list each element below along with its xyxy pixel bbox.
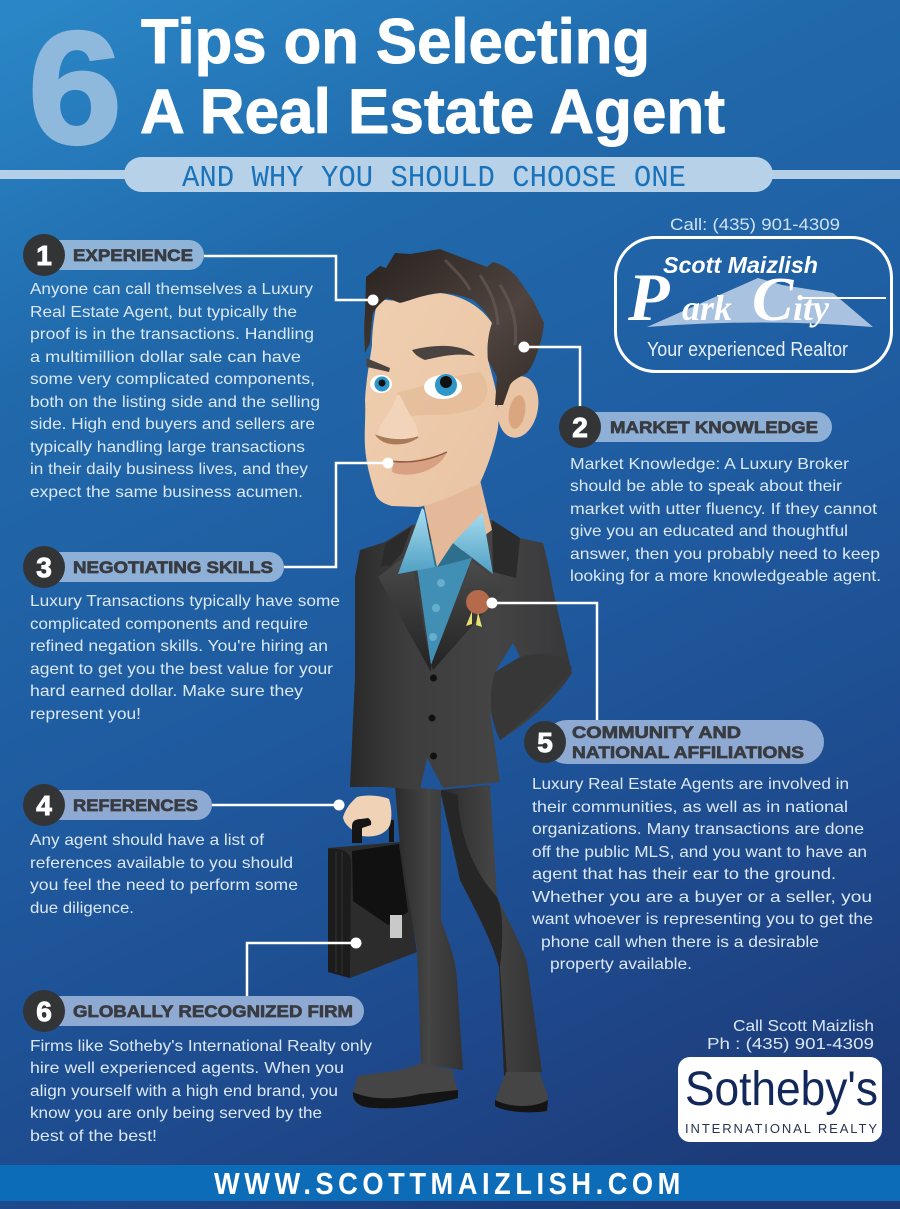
big numeral 6: 6 <box>28 0 122 177</box>
phone number top: Call: (435) 901-4309 <box>670 215 840 234</box>
nose <box>378 395 418 442</box>
tip 1: experience: both on the listing side and the selling <box>30 394 320 411</box>
tip 3: negotiating skills: Luxury Transactions typically have some <box>30 593 340 610</box>
tip 5: community and national affiliations: off the public MLS, and you want to have an <box>532 844 867 861</box>
contact text bottom: Ph : (435) 901-4309 <box>707 1036 874 1053</box>
left shoe <box>353 1063 458 1108</box>
tip 1: experience: typically handling large transactions <box>30 439 305 456</box>
brows <box>412 346 475 360</box>
briefcase handle <box>352 818 371 843</box>
tip 5: community and national affiliations: want whoever is representing you to get the <box>531 911 873 928</box>
tip 5: community and national affiliations: organizations. Many transactions are done <box>532 821 864 838</box>
footer band <box>0 1165 900 1201</box>
tip 4: references: 4 <box>36 790 52 821</box>
tip 2: market knowledge: give you an educated and thoughtful <box>570 523 848 540</box>
right shoe <box>495 1072 548 1112</box>
tip 1: experience: proof is in the transactions. Handling <box>30 326 314 343</box>
tip 3: negotiating skills: represent you! <box>30 706 141 723</box>
logo: Scott Maizlish Park City: C <box>752 266 794 334</box>
logo: Sotheby's International Realty <box>678 1057 882 1142</box>
tip 1: experience: a multimillion dollar sale can have <box>30 349 301 366</box>
tip 6: globally recognized firm: align yourself with a high end brand, you <box>30 1083 338 1100</box>
right leg <box>440 785 542 1076</box>
logo: Sotheby's International Realty: Sotheby's <box>685 1063 878 1116</box>
neck <box>424 480 492 570</box>
tip 3: negotiating skills: refined negation skills. You're hiring an <box>30 638 328 655</box>
logo: Scott Maizlish Park City: ity <box>793 288 830 328</box>
tip 5: community and national affiliations: 5 <box>537 727 553 758</box>
tip 5: community and national affiliations: Whether you are a buyer or a seller, you <box>532 889 872 906</box>
tip 2: market knowledge: answer, then you probably need to keep <box>570 546 880 563</box>
tip 2: market knowledge: 2 <box>572 412 588 443</box>
title: Tips on Selecting <box>141 7 650 77</box>
tip 1: experience: expect the same business acumen. <box>30 484 303 501</box>
jacket <box>350 520 572 790</box>
tip 1: experience: EXPERIENCE <box>73 246 193 265</box>
tip 1: experience: side. High end buyers and sellers are <box>30 416 315 433</box>
tip 4: references: REFERENCES <box>73 796 198 815</box>
face shading <box>397 372 487 420</box>
illustration: businessman <box>328 249 572 1112</box>
tip 6: globally recognized firm: 6 <box>36 996 52 1027</box>
face <box>365 293 498 507</box>
tip 2: market knowledge: market with utter fluency. If they cannot <box>570 501 878 518</box>
tip 3: negotiating skills: agent to get you the best value for your <box>30 661 334 678</box>
contact text bottom: Call Scott Maizlish <box>733 1018 874 1035</box>
hand <box>343 796 391 837</box>
sleeve fold <box>491 654 572 740</box>
tip 1: experience: Real Estate Agent, but typically the <box>30 304 297 321</box>
tip 5: community and national affiliations: NATIONAL AFFILIATIONS <box>572 743 804 762</box>
tip 2: market knowledge: Market Knowledge: A Luxury Broker <box>570 456 850 473</box>
collar right <box>453 510 493 574</box>
mouth <box>392 452 447 475</box>
subtitle banner: AND WHY YOU SHOULD CHOOSE ONE <box>182 161 686 196</box>
briefcase <box>328 842 417 978</box>
buttons <box>429 579 445 641</box>
lapels <box>378 553 431 672</box>
callout lines <box>204 256 597 997</box>
title: A Real Estate Agent <box>140 77 725 147</box>
tip 6: globally recognized firm <box>23 990 372 1145</box>
tip 4: references: you feel the need to perform some <box>30 877 298 894</box>
tip 6: globally recognized firm: GLOBALLY RECOGNIZED FIRM <box>73 1002 353 1021</box>
subtitle banner <box>0 157 900 196</box>
ear <box>493 373 543 441</box>
logo: Scott Maizlish Park City: Scott Maizlish <box>663 252 818 278</box>
logo: Scott Maizlish Park City <box>616 238 892 372</box>
logo: Scott Maizlish Park City: ark <box>682 288 732 328</box>
tip 5: community and national affiliations: COMMUNITY AND <box>572 723 741 742</box>
collar left <box>398 508 435 574</box>
tip 2: market knowledge: looking for a more knowledgeable agent. <box>570 568 881 585</box>
neck v <box>424 484 483 567</box>
tip 1: experience <box>23 234 320 501</box>
title <box>140 7 725 147</box>
tip 1: experience: some very complicated components, <box>30 371 315 388</box>
tip 3: negotiating skills: hard earned dollar. Make sure they <box>30 683 303 700</box>
logo: Scott Maizlish Park City: P <box>627 259 670 335</box>
tip 1: experience: 1 <box>36 240 52 271</box>
tip 5: community and national affiliations: agent that has their ear to the ground. <box>532 866 836 883</box>
website address: WWW.SCOTTMAIZLISH.COM <box>214 1167 680 1201</box>
tip 3: negotiating skills: NEGOTIATING SKILLS <box>73 558 273 577</box>
left leg <box>395 785 463 1070</box>
tip 3: negotiating skills <box>23 546 340 723</box>
tip 1: experience: in their daily business lives, and they <box>30 461 308 478</box>
hair <box>364 249 544 405</box>
briefcase handle right post <box>389 820 394 842</box>
arm gap <box>495 643 520 672</box>
tip 6: globally recognized firm: hire well experienced agents. When you <box>30 1060 344 1077</box>
tip 4: references: references available to you should <box>30 855 293 872</box>
rosette <box>466 611 482 627</box>
tip 5: community and national affiliations: Luxury Real Estate Agents are involved in <box>532 776 849 793</box>
logo: Scott Maizlish Park City: Your experienced Realtor <box>647 339 848 361</box>
logo: Sotheby's International Realty: INTERNATIONAL REALTY <box>685 1121 877 1136</box>
tip 2: market knowledge: should be able to speak about their <box>570 478 843 495</box>
tip 4: references <box>23 784 298 917</box>
tip 6: globally recognized firm: know you are only being served by the <box>30 1105 322 1122</box>
tip 5: community and national affiliations <box>524 720 873 973</box>
tip 1: experience: Anyone can call themselves a Luxury <box>30 281 313 298</box>
eyes <box>424 375 462 399</box>
tip 5: community and national affiliations: their communities, as well as in national <box>532 799 848 816</box>
tip 6: globally recognized firm: Firms like Sotheby's International Realty only <box>30 1038 372 1055</box>
hair highlights <box>445 260 516 345</box>
tip 4: references: due diligence. <box>30 900 134 917</box>
tip 3: negotiating skills: 3 <box>36 552 52 583</box>
shirt <box>415 553 472 665</box>
tip 5: community and national affiliations: property available. <box>550 956 692 973</box>
tip 5: community and national affiliations: phone call when there is a desirable <box>541 934 819 951</box>
tip 2: market knowledge: MARKET KNOWLEDGE <box>610 418 818 437</box>
tip 3: negotiating skills: complicated components and require <box>30 616 308 633</box>
tip 2: market knowledge <box>559 406 881 585</box>
tip 6: globally recognized firm: best of the best! <box>30 1128 157 1145</box>
tip 4: references: Any agent should have a list of <box>30 832 265 849</box>
contact text bottom <box>707 1018 874 1053</box>
